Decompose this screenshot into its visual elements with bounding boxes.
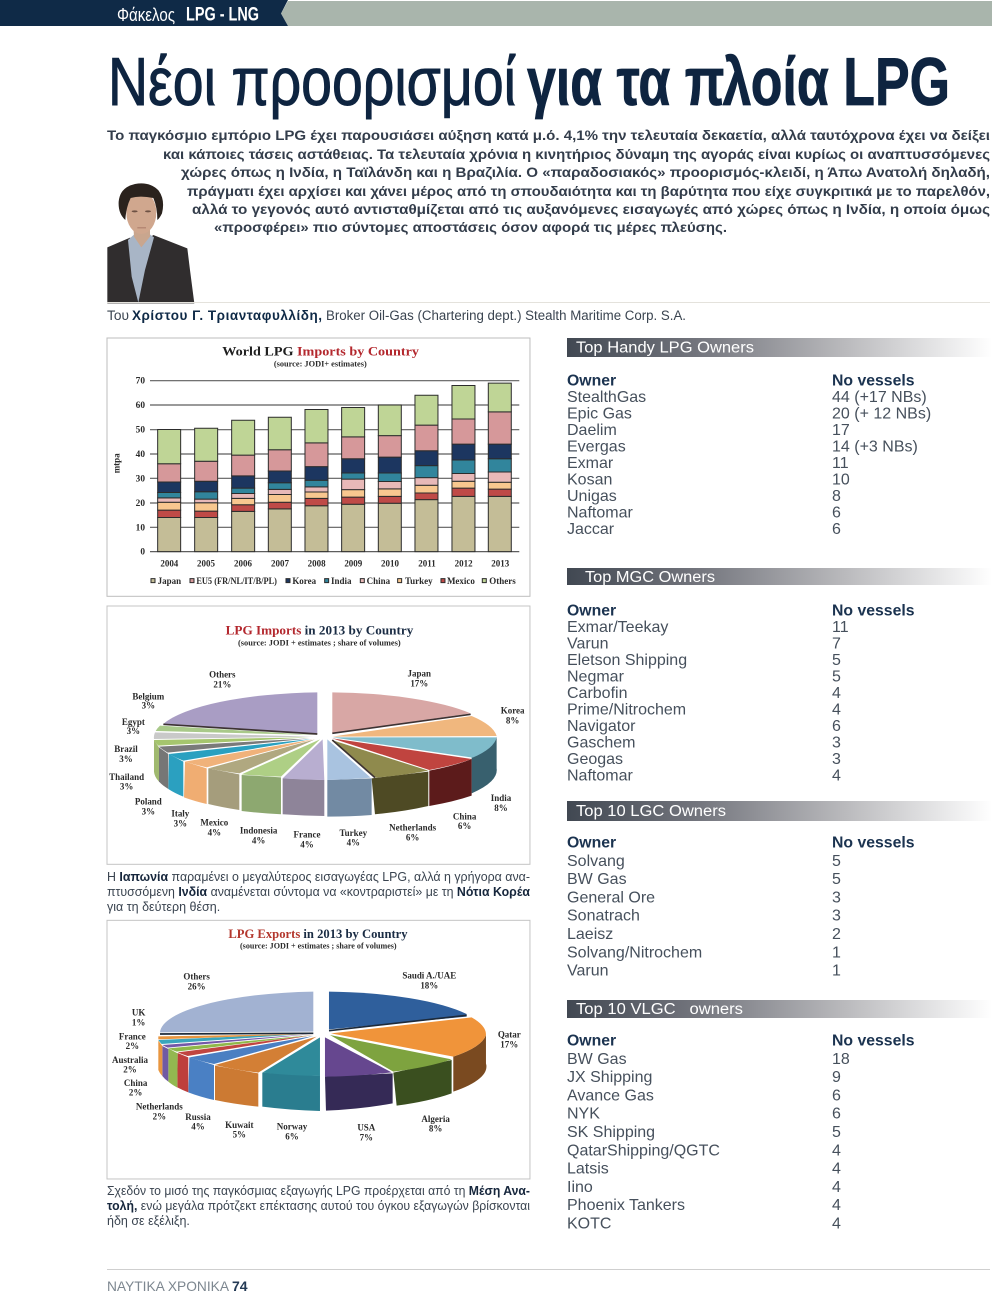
table: LGC owners xyxy=(567,834,915,980)
table: handy owners: No vessels xyxy=(832,372,915,390)
legend: Japan xyxy=(158,576,181,586)
table: MGC owners: 6 xyxy=(832,718,841,735)
bar chart: world LPG imports by country: (source: JODI+ estimates) xyxy=(274,360,367,369)
table: MGC owners: Gaschem xyxy=(567,734,635,752)
pie labels: India xyxy=(491,793,512,803)
table: handy owners: Naftomar xyxy=(567,504,633,522)
table: handy owners: Unigas xyxy=(567,488,617,505)
x axis years: 2005 xyxy=(197,559,215,569)
caption: exports: τολή, ενώ μεγάλα πρότζεκτ επέκτασης αυτού του όγκου εξαγωγών βρίσκονται xyxy=(107,1199,530,1213)
caption: exports: Σχεδόν το μισό της παγκόσμιας εξαγωγής LPG προέρχεται από τη Μέση Ανα- xyxy=(107,1184,530,1198)
pie labels: France xyxy=(119,1032,146,1042)
table: MGC owners: Negmar xyxy=(567,668,625,686)
table: MGC owners: 3 xyxy=(832,734,841,752)
table: MGC owners: 5 xyxy=(832,668,841,686)
pie labels xyxy=(109,669,525,849)
legend: India xyxy=(331,576,352,586)
legend: Mexico xyxy=(447,576,475,586)
table: VLGC owners: Avance Gas xyxy=(567,1087,654,1104)
pie labels: Others xyxy=(209,670,236,680)
y axis labels: 30 xyxy=(136,474,145,484)
x axis years xyxy=(160,559,510,569)
table: MGC owners: Eletson Shipping xyxy=(567,652,687,669)
pie labels: 3% xyxy=(119,754,133,764)
pie labels: 18% xyxy=(420,981,438,991)
pie labels: 8% xyxy=(506,716,519,726)
table: handy owners: 6 xyxy=(832,504,841,522)
table: handy owners: Daelim xyxy=(567,422,617,439)
table: MGC owners: Naftomar xyxy=(567,768,633,784)
table: MGC owners xyxy=(567,602,915,784)
pie labels: 4% xyxy=(300,839,314,849)
table: LGC owners: 2 xyxy=(832,926,841,943)
table: handy owners xyxy=(567,372,931,538)
pie chart: LPG exports in 2013 by country: (source: JODI + estimates ; share of volumes) xyxy=(240,941,397,950)
pie labels: Turkey xyxy=(339,828,368,838)
y axis labels: 70 xyxy=(136,377,145,387)
table: VLGC owners: 4 xyxy=(832,1142,841,1159)
table: VLGC owners: SK Shipping xyxy=(567,1124,655,1141)
pie labels: Brazil xyxy=(114,744,138,754)
header band xyxy=(0,0,992,26)
pie labels: Kuwait xyxy=(225,1120,254,1130)
legend: Others xyxy=(489,576,516,586)
y axis labels: 40 xyxy=(136,450,145,460)
table: LGC owners: 1 xyxy=(832,963,841,980)
pie labels: 4% xyxy=(208,828,221,838)
y axis labels: 50 xyxy=(136,426,145,436)
table heading: Top 10 VLGC owners: Top 10 VLGC owners xyxy=(576,1001,743,1018)
table heading: Top 10 LGC Owners: Top 10 LGC Owners xyxy=(576,803,726,820)
pie labels: USA xyxy=(357,1123,376,1133)
pie labels: 4% xyxy=(347,838,360,848)
chart title: World LPG Imports by Country xyxy=(222,345,420,359)
table: VLGC owners: 5 xyxy=(832,1124,841,1141)
y axis labels: 60 xyxy=(136,401,145,411)
pie labels: 26% xyxy=(188,981,206,991)
intro text: χώρες όπως η Ινδία, η Ταϊλάνδη και η Βραζιλία. Ο «παραδοσιακός» προορισμός-κλειδί, η Άπω Ανατολή δηλαδή, xyxy=(181,165,990,180)
table heading: Top Handy LPG Owners xyxy=(567,338,992,357)
x axis years: 2013 xyxy=(491,559,510,569)
table: VLGC owners: BW Gas xyxy=(567,1051,627,1068)
table: MGC owners: Owner xyxy=(567,602,616,620)
table: VLGC owners: QatarShipping/QGTC xyxy=(567,1142,720,1159)
bar chart: world LPG imports by country xyxy=(107,338,530,596)
legend: Korea xyxy=(292,576,317,586)
pie slices xyxy=(154,692,497,817)
y axis labels: 20 xyxy=(136,499,145,509)
pie labels: Saudi A./UAE xyxy=(402,971,456,981)
pie labels: 2% xyxy=(126,1041,139,1051)
pie labels: France xyxy=(294,830,320,840)
pie labels: 2% xyxy=(129,1087,142,1097)
pie labels: 2% xyxy=(123,1065,137,1075)
pie labels: 21% xyxy=(213,680,231,690)
table: handy owners: 6 xyxy=(832,521,841,538)
pie labels: 8% xyxy=(494,803,508,813)
x axis years: 2007 xyxy=(271,559,289,569)
table: MGC owners: 4 xyxy=(832,685,841,702)
intro text: και κάποιες τάσεις αστάθειας. Τα τελευταία χρόνια η κινητήριος δύναμη της αγοράς είναι κυρίως οι αναπτυσσόμενες xyxy=(163,147,990,162)
y axis labels: 10 xyxy=(136,523,145,533)
intro text: αλλά το γεγονός αυτό αντισταθμίζεται από τις αυξανόμενες εισαγωγές από χώρες όπως η Ινδία, η οποία όμως xyxy=(192,202,990,217)
table: handy owners: Jaccar xyxy=(567,521,615,538)
pie labels: 4% xyxy=(252,836,265,846)
caption: exports: ήδη σε εξέλιξη. xyxy=(107,1214,190,1228)
pie labels: 6% xyxy=(406,833,419,843)
table: LGC owners: 5 xyxy=(832,871,841,888)
caption: imports: πτυσσόμενη Ινδία αναμένεται σύντομα να «κοντραριστεί» με τη Νότια Κορέα xyxy=(107,885,530,899)
pie labels: Belgium xyxy=(132,691,165,701)
table: LGC owners: Varun xyxy=(567,963,609,980)
intro text: Το παγκόσμιο εμπόριο LPG έχει παρουσιάσει αύξηση κατά μ.ό. 4,1% την τελευταία δεκαετία, αλλά ταυτόχρονα έχει να δείξει xyxy=(107,128,990,143)
table: handy owners: 10 xyxy=(832,472,850,488)
pie labels xyxy=(112,971,521,1143)
table heading: Top MGC Owners: Top MGC Owners xyxy=(585,569,715,586)
table: MGC owners: Prime/Nitrochem xyxy=(567,702,686,718)
table: VLGC owners: Latsis xyxy=(567,1161,609,1178)
table: MGC owners: Navigator xyxy=(567,718,636,735)
y axis labels xyxy=(111,377,145,558)
table: handy owners: 8 xyxy=(832,488,841,505)
pie chart: LPG imports in 2013 by country: (source: JODI + estimates ; share of volumes) xyxy=(238,639,401,648)
table: handy owners: Epic Gas xyxy=(567,406,632,422)
legend xyxy=(151,576,516,586)
y axis labels: 0 xyxy=(140,548,145,558)
pie labels: Others xyxy=(183,971,210,981)
table: MGC owners: 4 xyxy=(832,702,841,718)
title: Νέοι προορισμοί xyxy=(108,44,516,120)
table: VLGC owners: NYK xyxy=(567,1106,600,1123)
table: VLGC owners: 6 xyxy=(832,1087,841,1104)
pie labels: Mexico xyxy=(200,817,229,827)
table: LGC owners: Laeisz xyxy=(567,926,613,943)
caption: exports xyxy=(107,1184,530,1228)
pie chart: LPG imports in 2013 by country xyxy=(107,606,530,864)
pie labels: Egypt xyxy=(122,717,145,727)
pie labels: Norway xyxy=(277,1122,308,1132)
x axis years: 2010 xyxy=(381,559,399,569)
pie labels: Italy xyxy=(171,808,190,818)
table: VLGC owners: Iino xyxy=(567,1179,593,1196)
legend: China xyxy=(367,576,391,586)
table: VLGC owners: 4 xyxy=(832,1161,841,1178)
title xyxy=(108,44,950,120)
caption: imports: Η Ιαπωνία παραμένει ο μεγαλύτερος εισαγωγέας LPG, αλλά η γρήγορα ανα- xyxy=(107,870,530,884)
chart title: LPG Imports in 2013 by Country xyxy=(226,623,414,637)
table: VLGC owners: Phoenix Tankers xyxy=(567,1197,685,1214)
pie labels: 3% xyxy=(142,701,155,711)
pie labels: 3% xyxy=(142,806,155,816)
table: handy owners: Exmar xyxy=(567,455,614,472)
chart title: LPG Exports in 2013 by Country xyxy=(228,927,408,941)
byline: Broker Oil-Gas (Chartering dept.) Stealth Maritime Corp. S.A. xyxy=(326,308,686,323)
pie labels: 6% xyxy=(458,821,471,831)
header band: LPG - LNG xyxy=(186,4,259,26)
pie labels: Algeria xyxy=(421,1114,450,1124)
pie labels: 17% xyxy=(410,679,428,689)
pie labels: 3% xyxy=(120,782,133,792)
pie labels: 2% xyxy=(153,1111,166,1121)
table: LGC owners: 5 xyxy=(832,853,841,870)
table: VLGC owners: 9 xyxy=(832,1069,841,1086)
table: LGC owners: BW Gas xyxy=(567,871,627,888)
pie labels: Korea xyxy=(501,706,525,716)
pie labels: Poland xyxy=(135,796,162,806)
pie labels: 17% xyxy=(500,1040,518,1050)
pie labels: China xyxy=(124,1078,148,1088)
pie labels: Netherlands xyxy=(136,1101,183,1111)
table: VLGC owners: 4 xyxy=(832,1179,841,1196)
pie labels: 1% xyxy=(132,1018,145,1028)
legend: EU5 (FR/NL/IT/B/PL) xyxy=(196,576,277,586)
table heading: Top 10 VLGC owners xyxy=(567,1000,992,1018)
caption: imports: για τη δεύτερη θέση. xyxy=(107,900,220,914)
table: MGC owners: 3 xyxy=(832,751,841,768)
table: handy owners: 17 xyxy=(832,422,850,439)
table: VLGC owners: 18 xyxy=(832,1051,850,1068)
table: LGC owners: Owner xyxy=(567,834,616,852)
byline xyxy=(107,308,686,323)
pie labels: Russia xyxy=(185,1112,211,1122)
x axis years: 2009 xyxy=(344,559,363,569)
table: VLGC owners: KOTC xyxy=(567,1216,611,1232)
pie labels: Australia xyxy=(112,1055,148,1065)
table: VLGC owners: 4 xyxy=(832,1216,841,1232)
table: LGC owners: General Ore xyxy=(567,889,655,906)
table: MGC owners: 11 xyxy=(832,619,849,636)
x axis years: 2008 xyxy=(308,559,326,569)
table: VLGC owners: No vessels xyxy=(832,1032,915,1050)
table: VLGC owners xyxy=(567,1032,915,1232)
pie slices xyxy=(158,992,486,1111)
table: MGC owners: Exmar/Teekay xyxy=(567,619,668,636)
table heading: Top 10 LGC Owners xyxy=(567,801,992,821)
byline: Του xyxy=(107,308,129,323)
legend: Turkey xyxy=(405,576,433,586)
table: LGC owners: 3 xyxy=(832,889,841,906)
pie labels: China xyxy=(453,811,477,821)
table: handy owners: Kosan xyxy=(567,472,612,488)
table: MGC owners: 5 xyxy=(832,652,841,669)
table: VLGC owners: 6 xyxy=(832,1106,841,1123)
pie labels: 5% xyxy=(233,1130,246,1140)
table: MGC owners: No vessels xyxy=(832,602,915,620)
table: handy owners: 14 (+3 NBs) xyxy=(832,438,918,456)
pie labels: Japan xyxy=(408,669,431,679)
pie chart: LPG exports in 2013 by country xyxy=(107,920,530,1179)
pie labels: Netherlands xyxy=(389,823,437,833)
table: handy owners: StealthGas xyxy=(567,389,646,406)
x axis years: 2012 xyxy=(455,559,473,569)
pie labels: 7% xyxy=(360,1133,373,1143)
table: VLGC owners: 4 xyxy=(832,1197,841,1214)
pie labels: 3% xyxy=(127,726,140,736)
table: LGC owners: No vessels xyxy=(832,834,915,852)
intro text xyxy=(107,128,990,235)
pie labels: Thailand xyxy=(109,772,144,782)
table heading: Top Handy LPG Owners: Top Handy LPG Owners xyxy=(576,340,754,356)
table: VLGC owners: Owner xyxy=(567,1032,616,1050)
x axis years: 2011 xyxy=(418,559,436,569)
table: LGC owners: 3 xyxy=(832,908,841,925)
table: MGC owners: 7 xyxy=(832,636,841,652)
pie labels: 8% xyxy=(429,1123,442,1133)
pie labels: UK xyxy=(132,1008,145,1018)
intro text: πράγματι έχει αρχίσει και χάνει μέρος από τη σπουδαιότητα και τη βαρύτητα που είχε συγκριτικά με το παρελθόν, xyxy=(187,184,990,199)
table: MGC owners: 4 xyxy=(832,768,841,784)
intro text: «προσφέρει» πιο σύντομες αποστάσεις όσον αφορά τις μέρες πλεύσης. xyxy=(214,220,727,235)
table: handy owners: Evergas xyxy=(567,438,626,456)
stacked bars xyxy=(158,383,511,552)
icon: author portrait xyxy=(107,183,194,303)
table: VLGC owners: JX Shipping xyxy=(567,1069,652,1086)
pie labels: 6% xyxy=(285,1131,299,1141)
y axis labels: mtpa xyxy=(111,453,121,473)
caption: imports xyxy=(107,870,530,914)
table: handy owners: 44 (+17 NBs) xyxy=(832,389,927,406)
pie labels: Qatar xyxy=(498,1030,521,1040)
header band: Φάκελος xyxy=(117,5,175,25)
table: handy owners: 11 xyxy=(832,455,849,472)
x axis years: 2004 xyxy=(160,559,179,569)
table: LGC owners: Solvang xyxy=(567,853,625,870)
table: MGC owners: Carbofin xyxy=(567,685,627,702)
pie labels: Indonesia xyxy=(240,826,278,836)
x axis years: 2006 xyxy=(234,559,252,569)
table: handy owners: 20 (+ 12 NBs) xyxy=(832,406,931,422)
table: handy owners: Owner xyxy=(567,372,616,390)
table: LGC owners: Sonatrach xyxy=(567,908,640,925)
table: MGC owners: Geogas xyxy=(567,751,623,768)
table: LGC owners: 1 xyxy=(832,944,841,961)
pie labels: 3% xyxy=(174,818,187,828)
table heading: Top MGC Owners xyxy=(567,568,992,586)
table: LGC owners: Solvang/Nitrochem xyxy=(567,944,702,961)
pie labels: 4% xyxy=(191,1122,205,1132)
byline: Χρίστου Γ. Τριανταφυλλίδη, xyxy=(132,308,322,323)
table: MGC owners: Varun xyxy=(567,636,609,652)
